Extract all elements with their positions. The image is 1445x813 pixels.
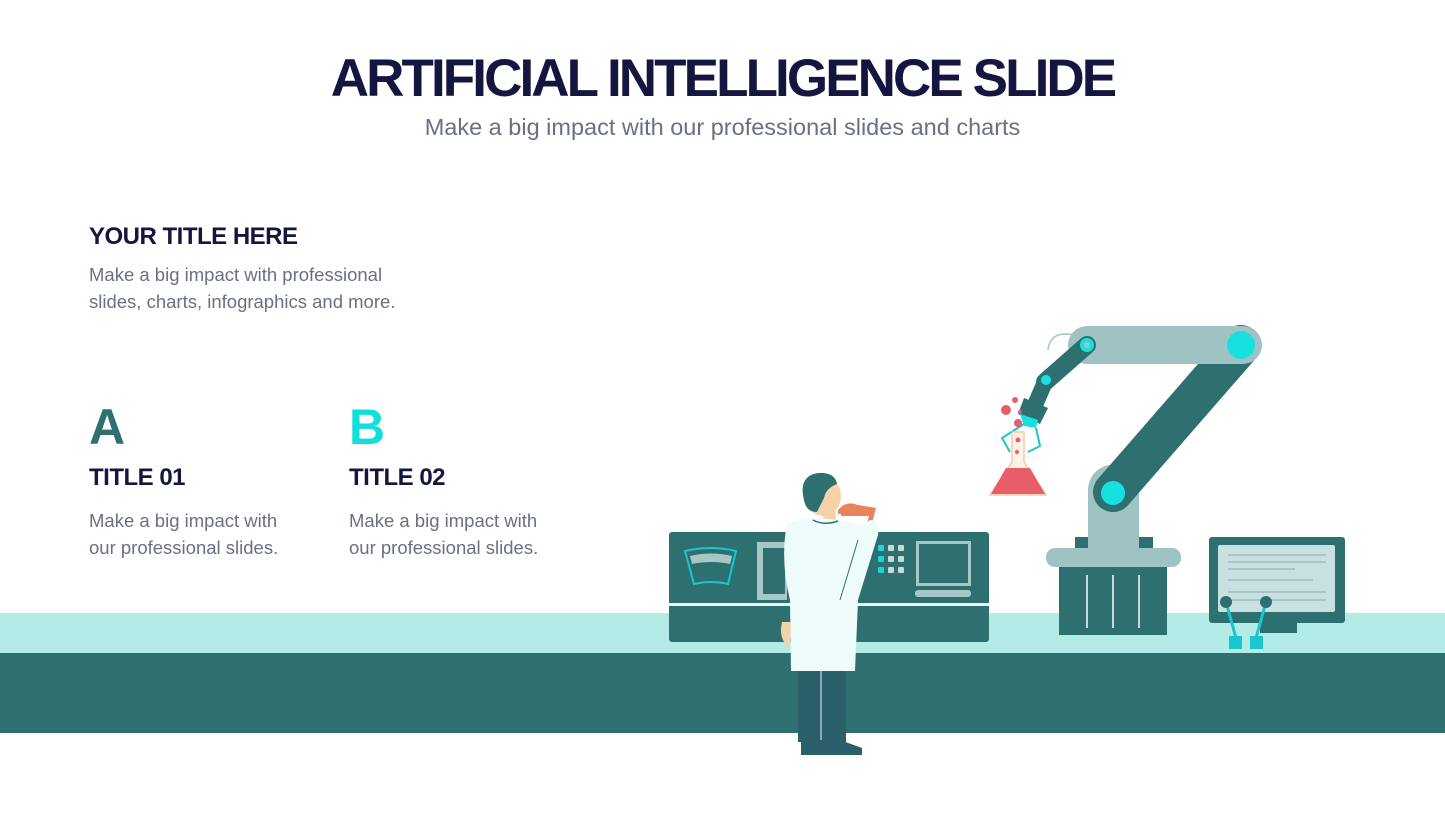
text block: main: Make a big impact with professional slides, charts, infographics and more. xyxy=(89,264,395,312)
section B: Make a big impact with our professional slides. xyxy=(349,510,538,558)
flask with bubbles xyxy=(990,397,1046,495)
right monitor xyxy=(1209,537,1345,649)
section B: B xyxy=(349,399,385,455)
console xyxy=(669,532,989,642)
subtitle: Make a big impact with our professional slides and charts xyxy=(425,114,1020,140)
robot arm xyxy=(1002,326,1262,635)
section A: Make a big impact with our professional slides. xyxy=(89,510,278,558)
section A xyxy=(89,399,278,558)
text block: main xyxy=(89,223,395,312)
section A: TITLE 01 xyxy=(89,464,185,491)
scientist xyxy=(781,473,878,755)
section A: A xyxy=(89,399,125,455)
title: ARTIFICIAL INTELLIGENCE SLIDE xyxy=(331,49,1114,108)
text block: main: YOUR TITLE HERE xyxy=(89,223,298,250)
section B xyxy=(349,399,538,558)
floor bands xyxy=(0,613,1445,733)
section B: TITLE 02 xyxy=(349,464,445,491)
